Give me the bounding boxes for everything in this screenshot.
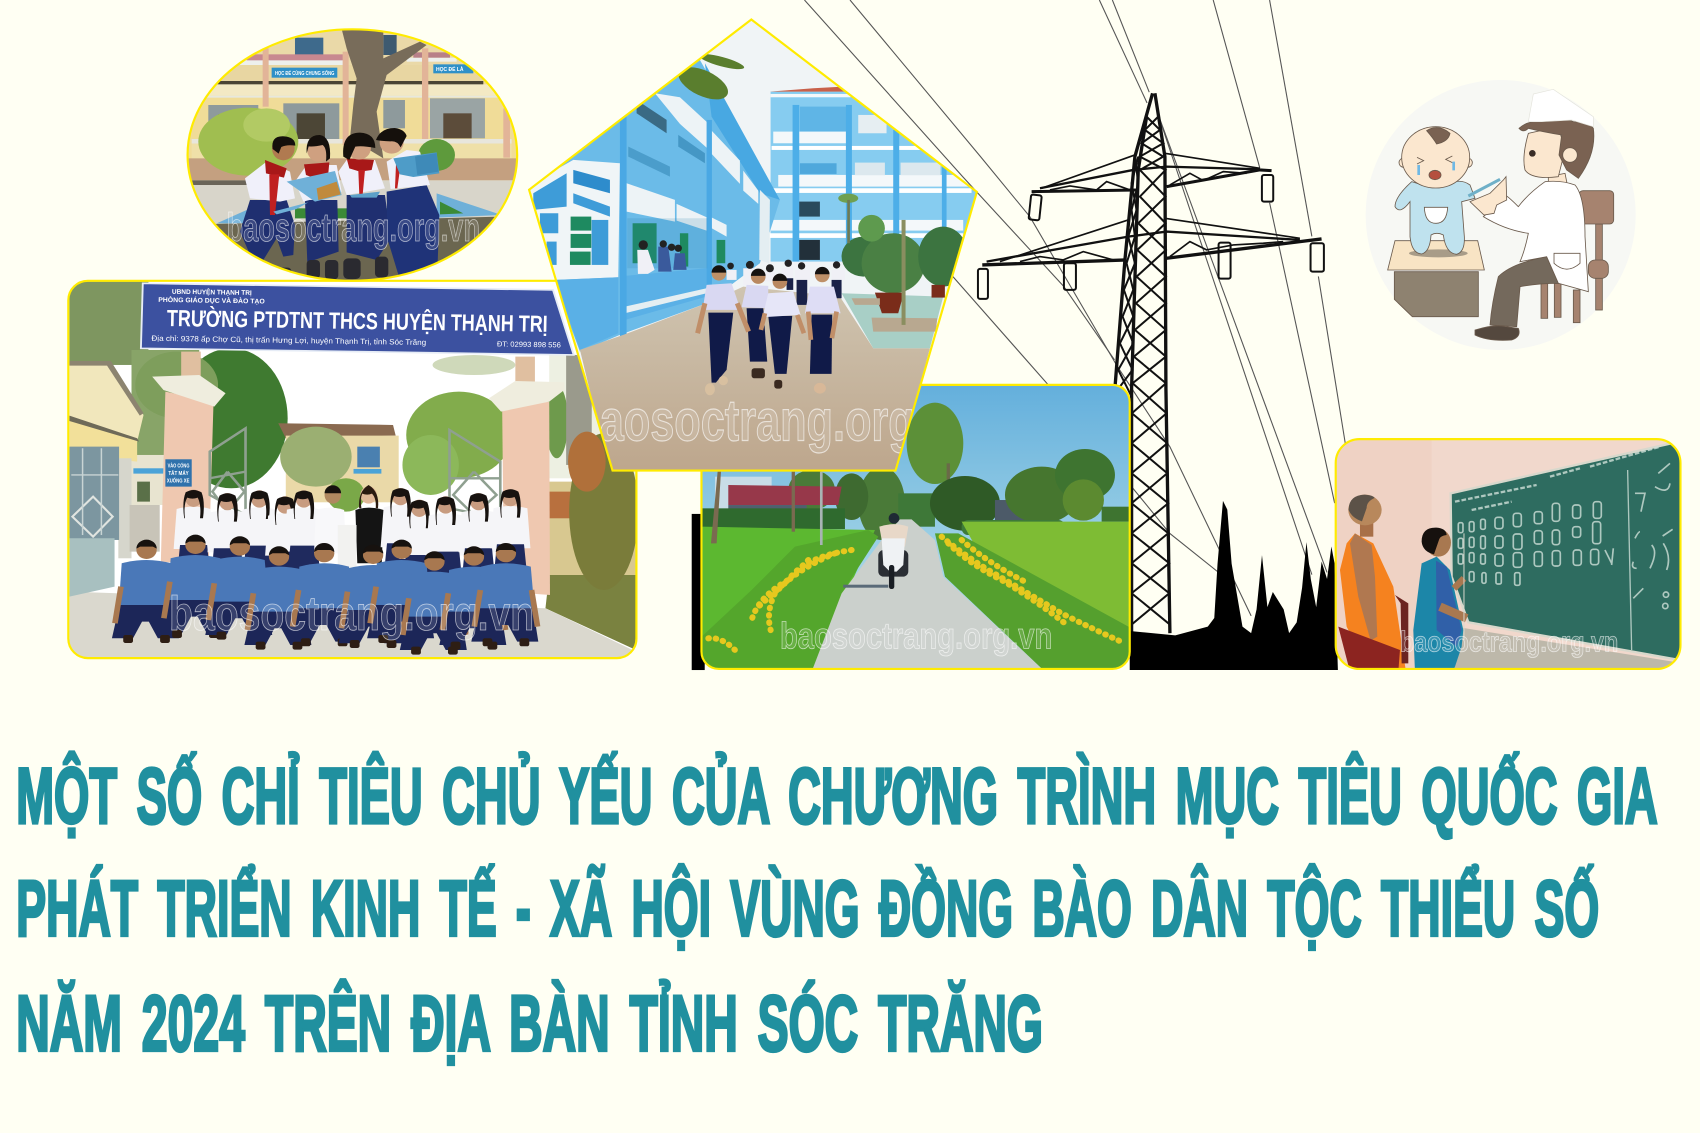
group of students, front row bbox=[112, 535, 538, 655]
right building bbox=[770, 87, 984, 262]
gate leaves bbox=[210, 428, 500, 518]
blue kerb and grass bbox=[217, 193, 502, 223]
potted trees bbox=[838, 194, 968, 332]
school building: HỌC ĐỂ LÀ bbox=[436, 66, 464, 73]
four pupils bbox=[240, 128, 439, 280]
poles bbox=[711, 472, 823, 545]
signboard bbox=[141, 283, 574, 355]
photo panel: pupils reading under tree bbox=[183, 27, 523, 283]
girl 4 bbox=[805, 267, 841, 394]
signboard: PHÒNG GIÁO DỤC VÀ ĐÀO TẠO bbox=[158, 295, 265, 305]
left building bbox=[523, 60, 780, 352]
school building bbox=[183, 27, 523, 180]
student bbox=[1413, 528, 1467, 672]
foliage bbox=[674, 51, 745, 106]
girl 3 bbox=[761, 274, 804, 389]
baby bbox=[1395, 127, 1475, 254]
ground bbox=[183, 180, 523, 224]
school building: HỌC ĐỂ CÙNG CHUNG SỐNG bbox=[275, 70, 334, 77]
corridor students bbox=[637, 240, 687, 274]
stone seat bbox=[213, 217, 500, 283]
yellow flowers bbox=[708, 537, 1125, 650]
paved tile court bbox=[842, 293, 943, 348]
distant buildings and trees bbox=[702, 403, 1132, 540]
power lines bbox=[804, 0, 1345, 616]
road bbox=[812, 519, 1045, 672]
girl 2 bbox=[742, 269, 768, 378]
signboard: Địa chỉ: 9378 ấp Chợ Cũ, thị trấn Hưng Lợi, huyện Thạnh Trị, tỉnh Sóc Trăng bbox=[151, 334, 427, 347]
title bbox=[16, 752, 1658, 1068]
motorbike rider bbox=[843, 513, 908, 589]
icon: doctor vaccinating baby bbox=[1366, 80, 1636, 350]
yard wall and shrub on the right bbox=[545, 355, 640, 652]
watermark: baosoctrang.org.vn bbox=[780, 615, 1052, 656]
chalk writing bbox=[1455, 447, 1673, 650]
black strip edge bbox=[692, 514, 705, 670]
right field bbox=[962, 522, 1129, 627]
ground bbox=[580, 287, 930, 473]
group of students, back row bbox=[174, 485, 530, 573]
watermark: baosoctrang.org.vn bbox=[169, 586, 534, 640]
crowd of students bbox=[727, 260, 845, 305]
left building bbox=[69, 361, 160, 597]
right verge bbox=[935, 533, 1132, 672]
photo panel: blue school building with students bbox=[523, 17, 984, 473]
ground bbox=[69, 592, 640, 662]
girl 1 bbox=[698, 265, 749, 395]
floor bbox=[1455, 628, 1672, 668]
electricity pylon bbox=[978, 93, 1324, 633]
photo panel: rural road bbox=[700, 383, 1132, 672]
signboard: TRƯỜNG PTDTNT THCS HUYỆN THẠNH TRỊ bbox=[167, 303, 548, 338]
tree line silhouette bbox=[1130, 501, 1338, 670]
table bbox=[1388, 241, 1484, 317]
watermark: baosoctrang.org.vn bbox=[227, 206, 480, 250]
monk bbox=[1340, 495, 1406, 672]
blackboard bbox=[1451, 441, 1683, 661]
left verge bbox=[702, 530, 878, 672]
left field bbox=[702, 527, 875, 672]
doctor bbox=[1468, 89, 1594, 340]
photo panel: Khmer blackboard lesson bbox=[1335, 438, 1683, 672]
chair and red table bbox=[1338, 595, 1408, 672]
gate pillars bbox=[161, 352, 550, 595]
notice board: XUỐNG XE bbox=[167, 478, 190, 484]
watermark: baosoctrang.org.vn bbox=[573, 389, 977, 454]
tree trunk bbox=[342, 29, 427, 158]
notice board: VÀO CỔNG bbox=[168, 463, 189, 470]
watermark: baosoctrang.org.vn bbox=[1400, 627, 1618, 659]
signboard: UBND HUYỆN THẠNH TRỊ bbox=[172, 287, 252, 297]
back building bbox=[131, 423, 399, 512]
bushes bbox=[198, 108, 455, 176]
trees behind gate bbox=[69, 282, 640, 495]
notice board bbox=[165, 459, 192, 487]
chair bbox=[1541, 191, 1614, 323]
notice board: TẮT MÁY bbox=[168, 469, 189, 477]
photo panel: boarding school gate bbox=[66, 278, 641, 662]
signboard: ĐT: 02993 898 556 bbox=[497, 340, 561, 349]
